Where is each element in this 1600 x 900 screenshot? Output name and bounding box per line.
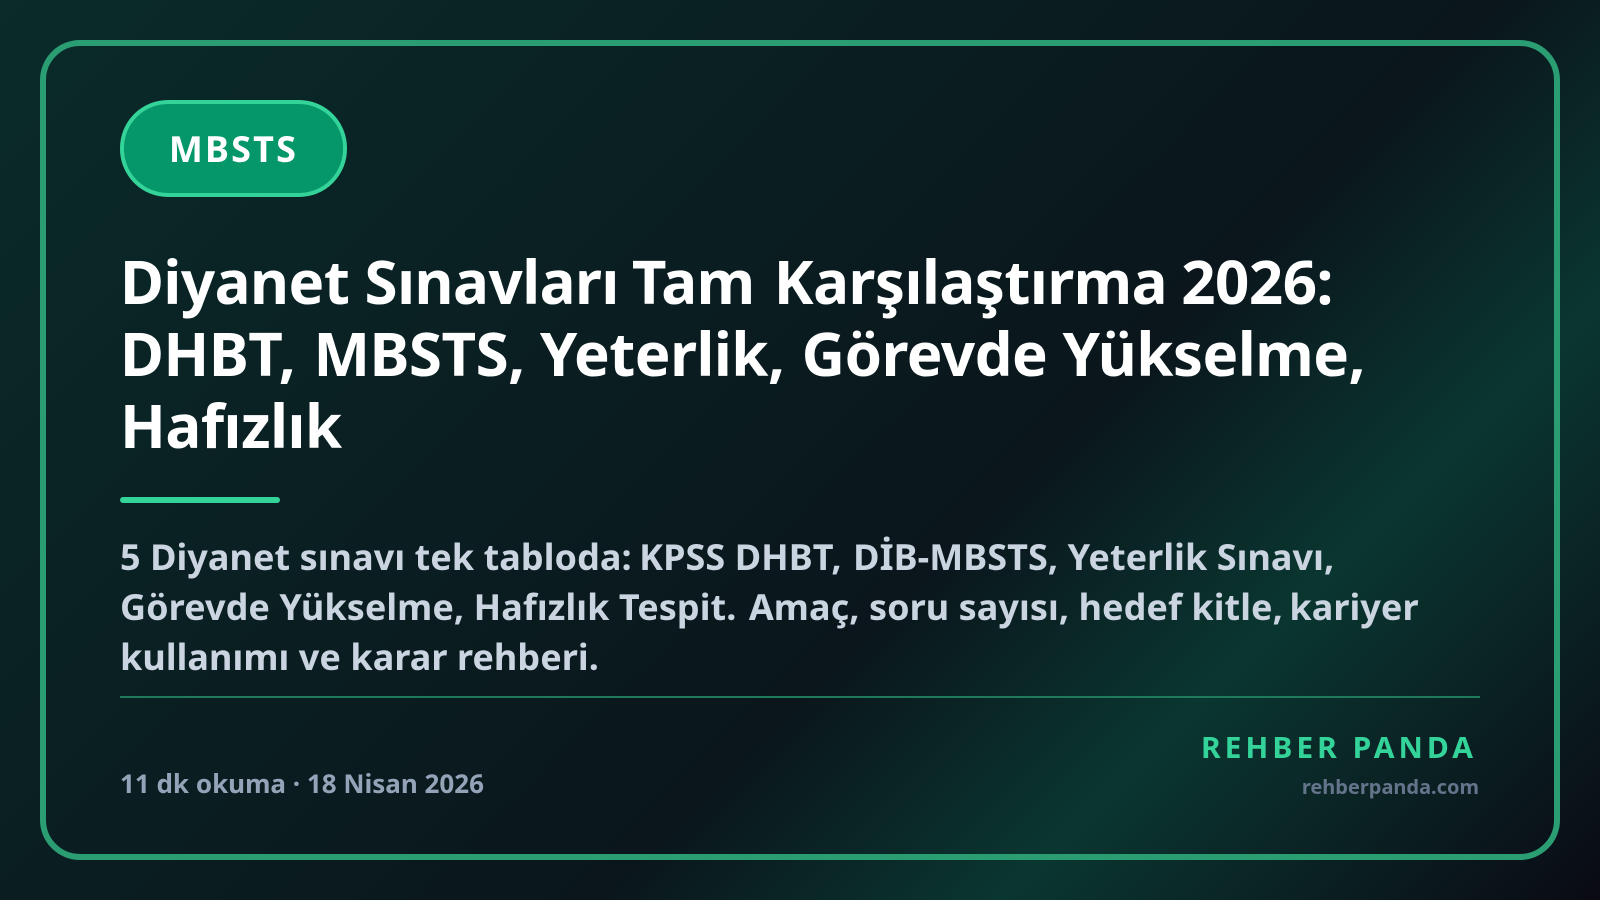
website url: rehberpanda.com <box>1302 773 1479 800</box>
badge: MBSTS: MBSTS <box>169 124 298 173</box>
title: Hafızlık <box>120 384 342 466</box>
reading time and date: 11 dk okuma · 18 Nisan 2026 <box>120 765 484 801</box>
subtitle: kullanımı ve karar rehberi. <box>120 632 599 681</box>
title: Diyanet Sınavları Tam Karşılaştırma 2026: <box>120 240 1333 322</box>
divider <box>120 696 1480 698</box>
subtitle: 5 Diyanet sınavı tek tabloda: KPSS DHBT, DİB-MBSTS, Yeterlik Sınavı, <box>120 532 1334 581</box>
brand name: REHBER PANDA <box>1201 726 1477 767</box>
accent bar <box>120 497 280 503</box>
badge: MBSTS <box>120 100 347 197</box>
title: DHBT, MBSTS, Yeterlik, Görevde Yükselme, <box>120 312 1365 394</box>
subtitle <box>120 532 1419 681</box>
title <box>120 240 1365 466</box>
subtitle: Görevde Yükselme, Hafızlık Tespit. Amaç, soru sayısı, hedef kitle, kariyer <box>120 582 1419 631</box>
